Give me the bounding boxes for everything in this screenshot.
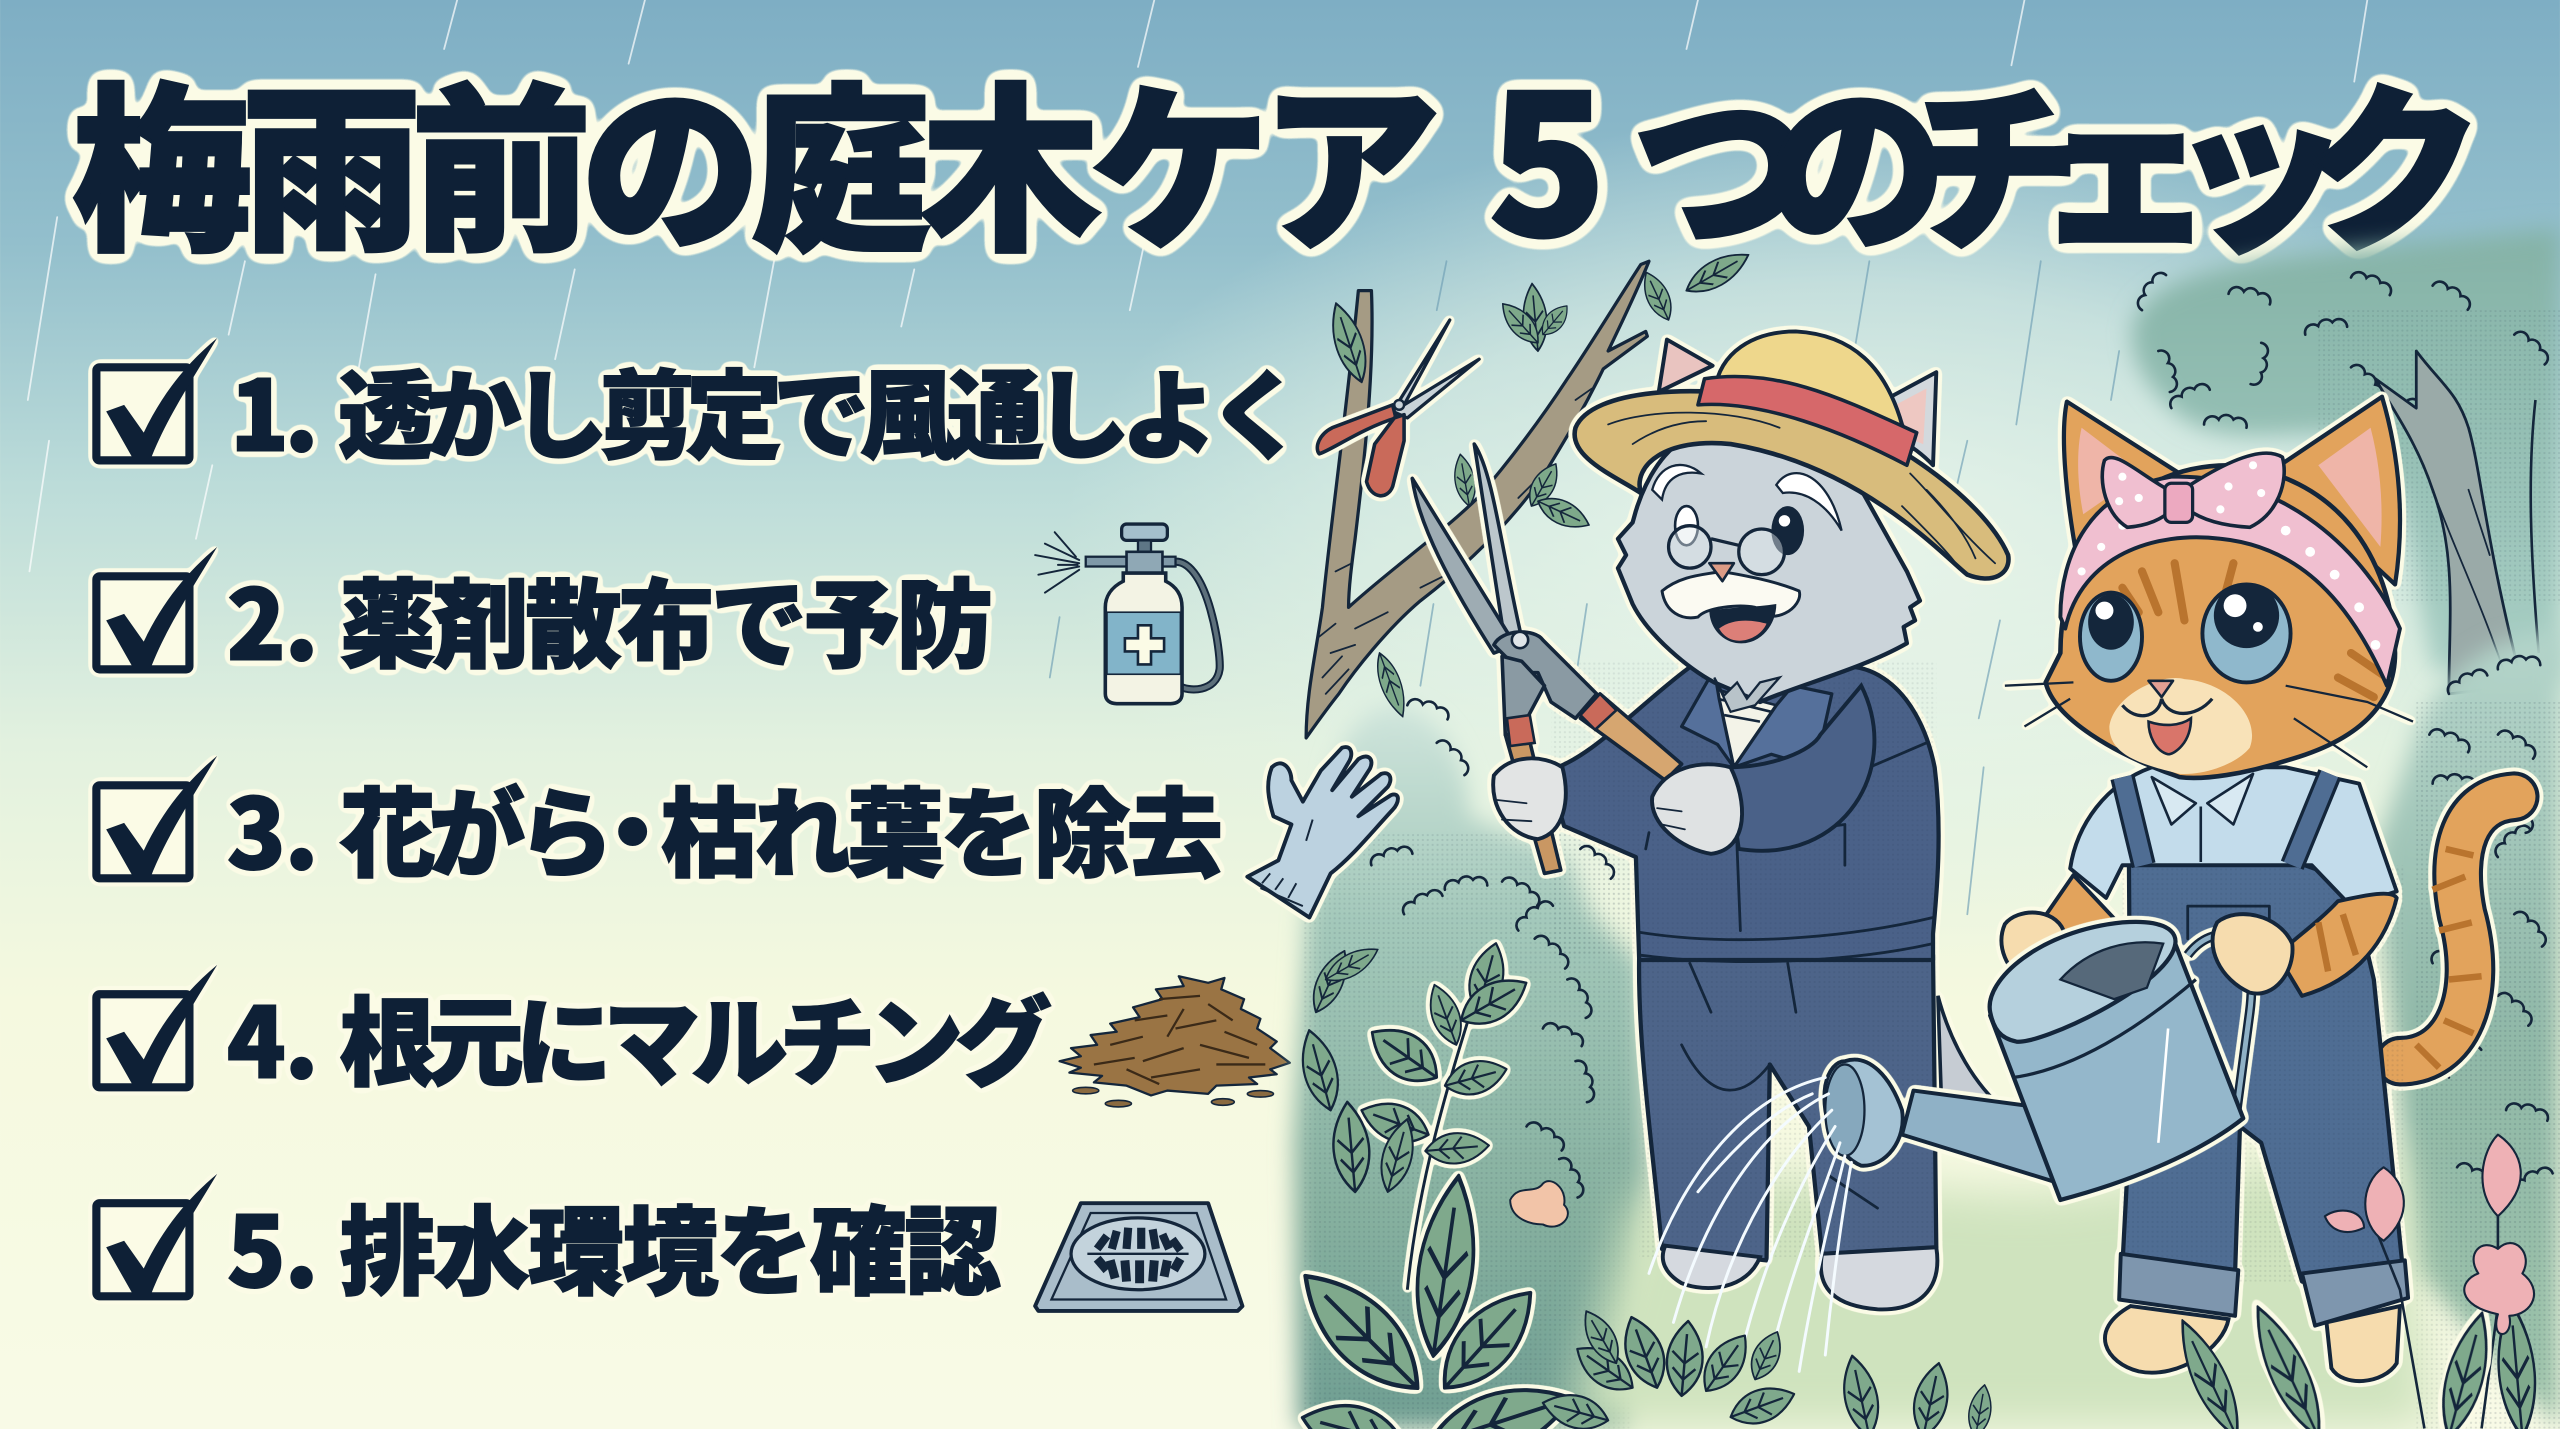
item 1 number: 1. [230, 339, 318, 479]
illustration: ground [1567, 1151, 2433, 1429]
background glow right [1061, 114, 2560, 963]
illustration: tree branches [1306, 244, 1755, 738]
cat tail [1938, 996, 2005, 1143]
item 5 number: 5. [227, 1174, 318, 1314]
item 1 [96, 338, 1304, 479]
illustration: watering can [1824, 922, 2251, 1200]
mouth [1709, 604, 1776, 643]
eyes [1675, 506, 1698, 545]
branch leaves [1323, 244, 1755, 720]
collar [1682, 669, 1832, 767]
sprig leaves [1355, 939, 1535, 1290]
item 3 text second part: 枯れ葉を除去 [661, 757, 1223, 897]
headband bow [2102, 453, 2284, 527]
mouth [2122, 699, 2212, 716]
checkbox 4 [96, 965, 217, 1087]
tree trunk [2375, 351, 2522, 694]
illustration: left foliage [1293, 696, 1649, 1429]
title [72, 13, 2483, 291]
overall legs [2122, 864, 2405, 1290]
muzzle and moustache [1662, 571, 1800, 618]
canopy scallops [2134, 269, 2553, 439]
can handle [2188, 935, 2251, 1110]
paws [1821, 1247, 1937, 1309]
bush scallops [2428, 653, 2553, 1195]
spout [1902, 1091, 2060, 1184]
item 3 [96, 756, 1223, 897]
glasses [1669, 526, 1784, 575]
eyebrows [1652, 465, 1842, 531]
flower: peach blossom [1510, 1181, 1568, 1227]
nose [1709, 563, 1734, 581]
checkbox 3 [96, 756, 217, 878]
item 1 text: 透かし剪定で風通しよく [338, 339, 1304, 479]
headband [2060, 477, 2400, 686]
illustration: grandpa cat [1412, 331, 2008, 1309]
cuffs [2119, 1254, 2238, 1316]
arms [2041, 875, 2122, 963]
can body [1990, 934, 2243, 1200]
icon: mulch pile [1060, 976, 1290, 1107]
head [2046, 465, 2395, 778]
forehead stripes [2122, 563, 2233, 620]
item 3 text first part: 花がら [340, 757, 614, 897]
nose [2149, 681, 2173, 697]
undershirt [1714, 689, 1776, 767]
illustration: girl cat [2001, 397, 2514, 1381]
hand on can [2213, 914, 2293, 994]
item 2 number: 2. [227, 548, 318, 688]
trousers [1639, 955, 1936, 1260]
overall straps [2122, 774, 2330, 865]
water spray [1649, 1078, 1851, 1371]
checkbox 1 [96, 338, 217, 460]
foliage scallops [1322, 696, 1619, 1198]
tail [2400, 797, 2514, 1068]
sleeve [1727, 686, 1874, 851]
shirt [2070, 767, 2397, 906]
illustration: right bush [2375, 629, 2560, 1429]
gloved hands [1493, 758, 1566, 839]
item 3 number: 3. [227, 757, 318, 897]
icon: hand pruners [1317, 320, 1479, 496]
tree canopy [2132, 229, 2560, 686]
item 4 number: 4. [227, 966, 318, 1106]
illustration: pink flowers and right leaves [2168, 1135, 2540, 1429]
item 5 [96, 1174, 1001, 1314]
item 2 [96, 547, 993, 688]
item 2 text: 薬剤散布で予防 [340, 548, 993, 688]
checklist [96, 338, 1304, 1314]
straw hat [1575, 331, 2008, 579]
icon: drain grate [1035, 1203, 1242, 1311]
ears [1659, 340, 1713, 392]
jacket [1548, 661, 1939, 960]
item 4 text: 根元にマルチング [340, 966, 1051, 1106]
item 4 [96, 965, 1051, 1106]
icon: sprayer [1035, 524, 1220, 704]
checkbox 5 [96, 1174, 217, 1296]
illustration: foreground leaves left [1284, 939, 1995, 1429]
item 5 text: 排水環境を確認 [340, 1174, 1001, 1314]
large foreground leaves [1284, 1173, 1580, 1429]
checkbox 2 [96, 547, 217, 669]
icon: glove [1247, 747, 1398, 918]
title line left part: 梅雨前の庭木ケア [72, 27, 1440, 287]
hedge shears [1412, 444, 1682, 873]
ears [2064, 402, 2180, 547]
feet [2105, 1306, 2229, 1373]
collar and buttons [2152, 774, 2253, 862]
title numeral: 5 [1489, 13, 1606, 291]
head [1618, 408, 1920, 702]
rain streaks [28, 0, 2367, 914]
muzzle [2109, 678, 2252, 774]
eyes [2080, 583, 2291, 682]
title line right part: つのチェック [1633, 27, 2483, 287]
whiskers [2005, 682, 2413, 767]
chin tuft [1714, 678, 1780, 712]
sprinkler rose [1824, 1060, 1903, 1166]
illustration: top-right tree foliage [2132, 229, 2560, 694]
item 3 separator: ・ [585, 757, 681, 897]
left hand [2001, 913, 2064, 980]
